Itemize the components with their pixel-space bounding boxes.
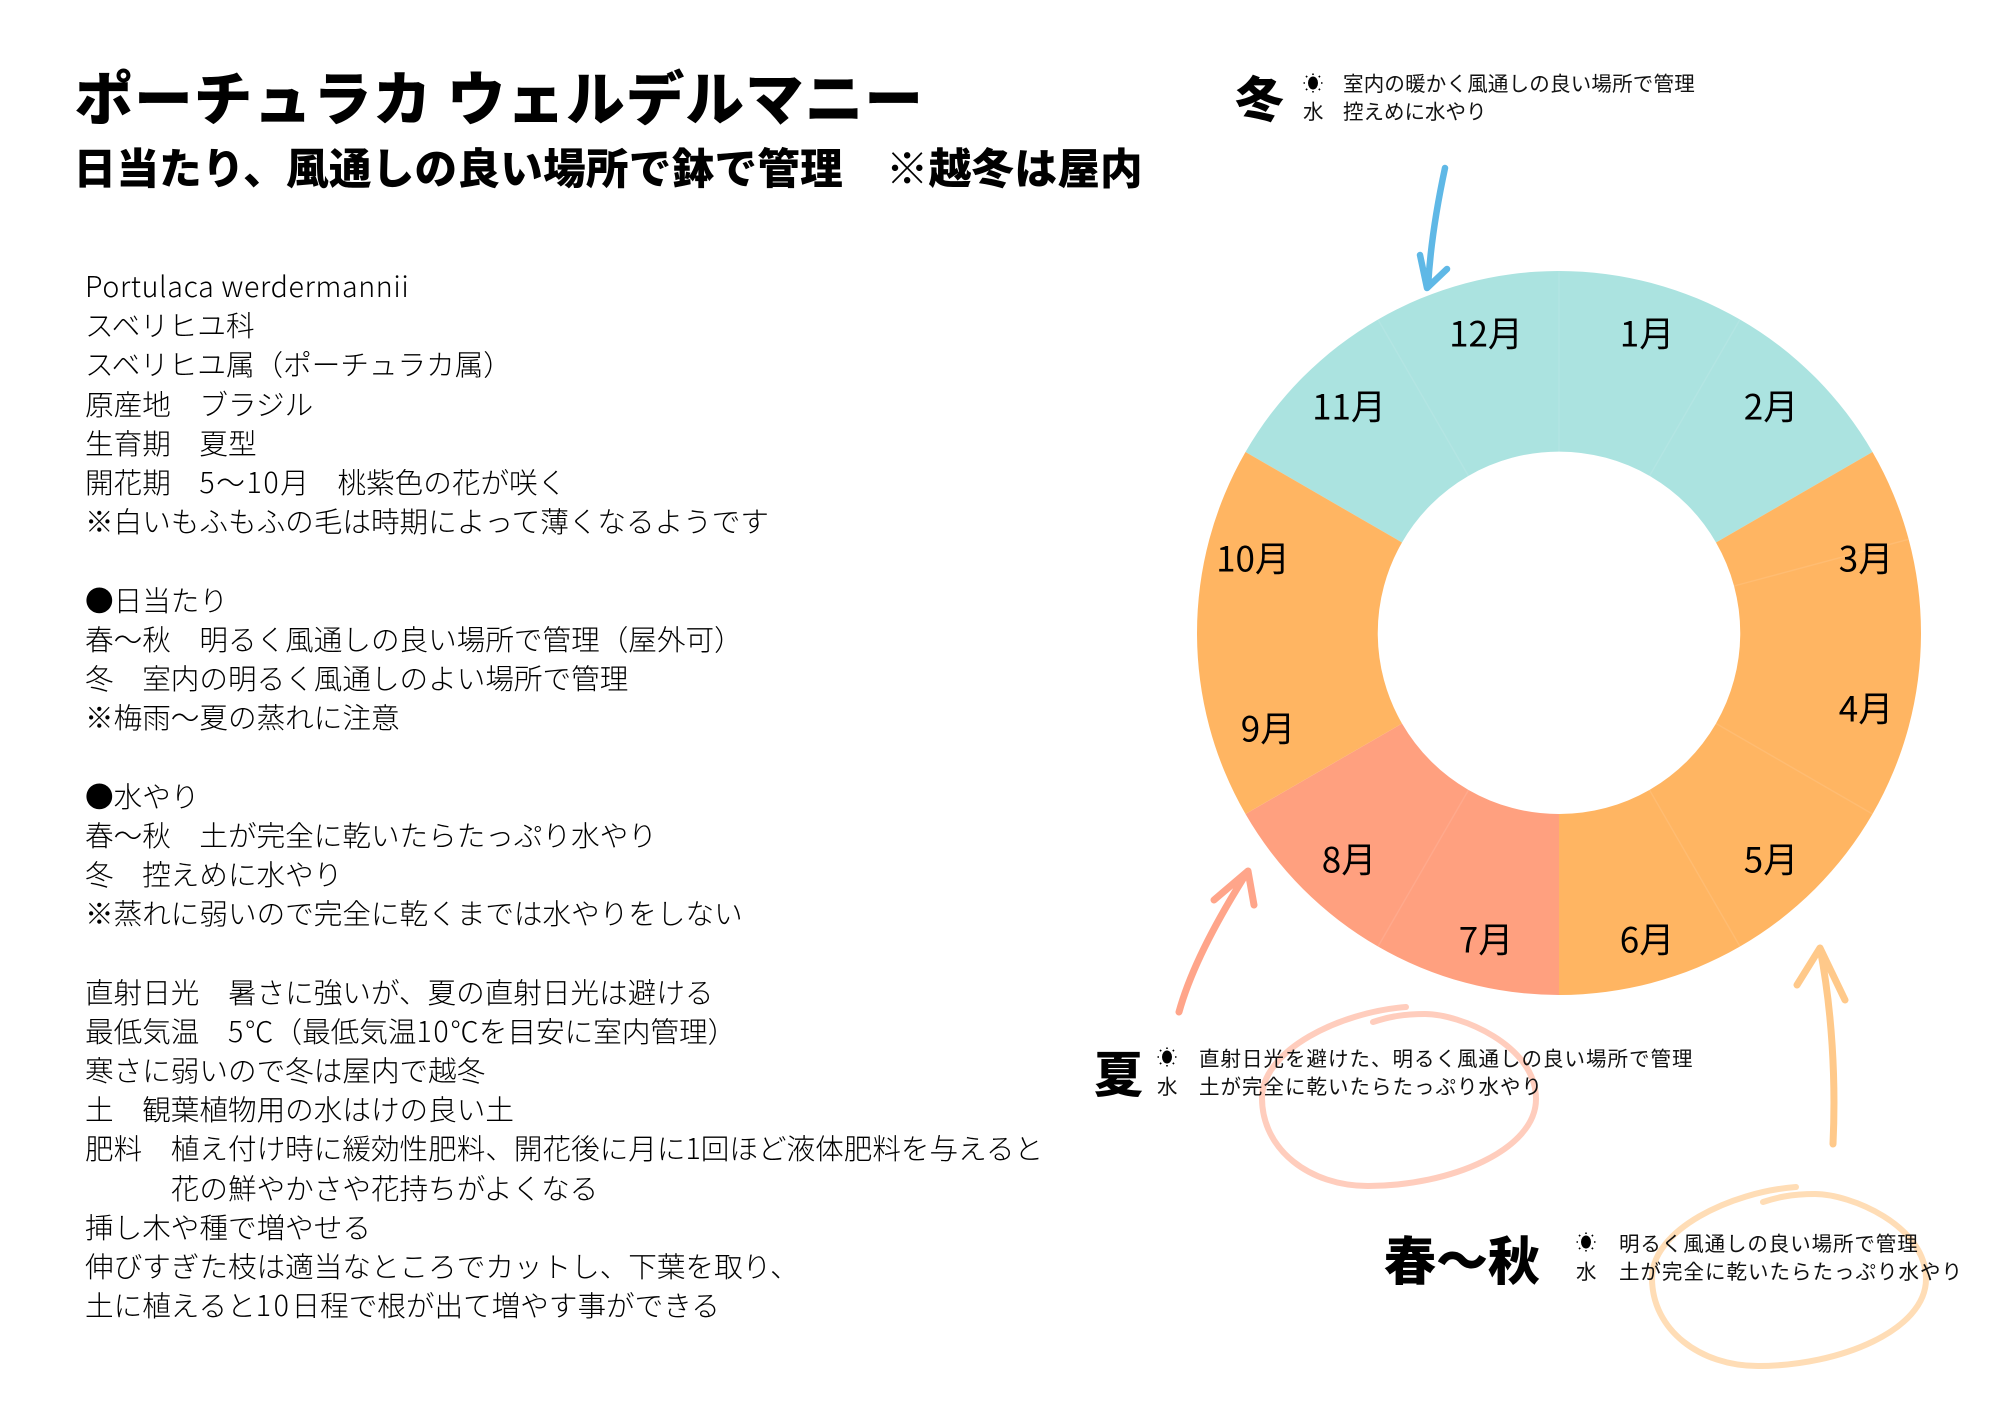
month labels: 7月 (1459, 912, 1513, 964)
title: ポーチュラカ ウェルデルマニー (74, 52, 924, 137)
winter legend (1235, 61, 1695, 132)
light note: 室内の暖かく風通しの良い場所で管理 (1343, 67, 1695, 97)
water label: 水 (1157, 1070, 1178, 1100)
month labels: 12月 (1449, 306, 1523, 358)
arrow: summer (1179, 871, 1254, 1012)
water note: 土が完全に乾いたらたっぷり水やり (1199, 1070, 1543, 1100)
sun icon (1576, 1232, 1596, 1252)
text block: plant care notes: Portulaca werdermannii スベリヒユ科 スベリヒユ属（ポーチュラカ属） 原産地 ブラジル 生育期 夏型 開花期 5〜10月 桃紫色の花が咲く ※白いもふもふの毛は時期によって薄くなるようです ●日当たり 春〜秋 明るく風通しの良い場所で管理（屋外可） 冬 室内の明るく風通しのよい場所で管理 ※梅雨〜夏の蒸れに注意 ●水やり 春〜秋 土が完全に乾いたらたっぷり水やり 冬 控えめに水やり ※蒸れに弱いので完全に乾くまでは水やりをしない 直射日光 暑さに強いが、夏の直射日光は避ける 最低気温 5℃（最低気温10℃を目安に室内管理） 寒さに弱いので冬は屋内で越冬 土 観葉植物用の水はけの良い土 肥料 植え付け時に緩効性肥料、開花後に月に1回ほど液体肥料を与えると 花の鮮やかさや花持ちがよくなる 挿し木や種で増やせる 伸びすぎた枝は適当なところでカットし、下葉を取り、 土に植えると10日程で根が出て増やす事ができる (85, 265, 1043, 1325)
water note: 控えめに水やり (1343, 95, 1486, 125)
season ring: autumn left (1197, 452, 1402, 814)
month labels: 11月 (1312, 380, 1386, 430)
season ring: winter (1246, 271, 1872, 542)
light note: 直射日光を避けた、明るく風通しの良い場所で管理 (1199, 1042, 1694, 1072)
water label: 水 (1576, 1254, 1596, 1284)
month labels: 1月 (1620, 306, 1674, 358)
month labels: 8月 (1322, 832, 1376, 884)
subtitle: 日当たり、風通しの良い場所で鉢で管理 ※越冬は屋内 (74, 136, 1143, 197)
heading: summer: 夏 (1094, 1036, 1143, 1107)
hand-drawn circle: summer (1262, 1007, 1536, 1186)
sun icon (1304, 74, 1322, 92)
month labels: 6月 (1620, 912, 1674, 964)
sun icon (1158, 1048, 1176, 1066)
spring to autumn legend (1384, 1220, 1963, 1294)
month labels: 2月 (1744, 380, 1798, 430)
month labels: 10月 (1216, 532, 1290, 582)
month labels: 5月 (1744, 832, 1798, 884)
hand-drawn circle: spring to autumn (1652, 1187, 1926, 1366)
month labels (1216, 306, 1893, 964)
water note: 土が完全に乾いたらたっぷり水やり (1619, 1254, 1963, 1284)
heading: spring to autumn: 春〜秋 (1384, 1220, 1540, 1294)
summer legend (1094, 1036, 1694, 1107)
arrow: winter (1420, 168, 1447, 288)
month labels: 9月 (1241, 702, 1295, 752)
season ring: spring to autumn right (1559, 452, 1921, 995)
month labels: 3月 (1839, 532, 1893, 582)
season ring: summer (1246, 724, 1559, 995)
water label: 水 (1303, 95, 1324, 125)
arrow: spring to autumn (1797, 948, 1845, 1144)
light note: 明るく風通しの良い場所で管理 (1619, 1226, 1919, 1256)
month labels: 4月 (1839, 682, 1893, 732)
heading: winter: 冬 (1235, 61, 1284, 132)
